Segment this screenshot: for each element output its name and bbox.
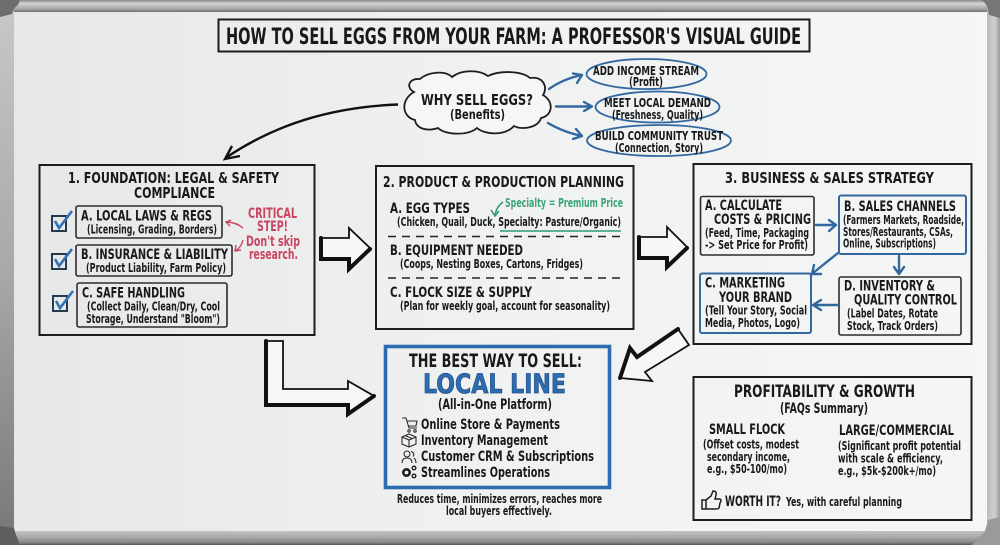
checkbox B — [52, 249, 72, 269]
cloud: why sell eggs — [404, 71, 551, 134]
heading: foundation — [68, 169, 280, 202]
checkbox C — [53, 291, 73, 311]
egg types: A. EGG TYPES — [390, 201, 470, 217]
calculate costs: (Feed, Time, Packaging — [705, 225, 809, 240]
title — [218, 20, 810, 52]
heading: product planning: 2. PRODUCT & PRODUCTION PLANNING — [383, 173, 624, 191]
icon: gears — [403, 466, 416, 478]
calculate costs: A. CALCULATE — [705, 198, 782, 214]
safe handling box: C. SAFE HANDLING — [82, 286, 185, 302]
inventory quality: Stock, Track Orders) — [847, 318, 938, 333]
benefit: build community trust — [587, 125, 731, 156]
heading: profitability — [734, 382, 915, 417]
marketing brand — [700, 274, 811, 333]
feature: operations: Streamlines Operations — [421, 465, 550, 481]
arrow: step 1 to step 2 — [320, 228, 371, 270]
marketing brand: YOUR BRAND — [718, 290, 792, 306]
flow arrows — [812, 220, 904, 310]
benefit: meet local demand: MEET LOCAL DEMAND — [604, 95, 711, 110]
panel: product planning — [376, 166, 634, 329]
large commercial: e.g., $5k-$200k+/mo) — [838, 463, 936, 478]
small flock — [703, 422, 799, 476]
caption: local line benefits: local buyers effectively. — [446, 503, 552, 518]
icon: cart — [402, 418, 417, 432]
equipment needed: (Coops, Nesting Boxes, Cartons, Fridges) — [400, 256, 583, 271]
arrow: step 2 to step 3 — [638, 227, 688, 268]
inventory quality — [839, 277, 961, 335]
benefit: meet local demand — [596, 92, 720, 122]
benefit: build community trust: BUILD COMMUNITY TRUST — [595, 128, 723, 143]
icon: box — [402, 434, 416, 447]
heading: foundation: COMPLIANCE — [134, 184, 215, 202]
egg types: Specialty = Premium Price — [505, 195, 623, 210]
arrow: step 3 to best way — [620, 329, 689, 381]
calculate costs: -> Set Price for Profit) — [705, 237, 808, 252]
calculate costs: COSTS & PRICING — [714, 212, 811, 228]
local laws box — [76, 206, 222, 238]
marketing brand: Media, Photos, Logo) — [705, 315, 800, 330]
inventory quality: D. INVENTORY & — [844, 278, 935, 294]
safe handling box: Storage, Understand "Bloom") — [86, 311, 220, 326]
calculate costs — [700, 196, 814, 255]
flock size: C. FLOCK SIZE & SUPPLY — [390, 285, 532, 301]
small flock: SMALL FLOCK — [709, 422, 786, 438]
marketing brand: (Tell Your Story, Social — [705, 302, 807, 318]
panel: profitability — [694, 377, 972, 520]
icon: customers — [402, 451, 416, 463]
feature: online store: Online Store & Payments — [421, 417, 560, 433]
icon: thumbs up — [702, 491, 721, 509]
benefit: build community trust: (Connection, Story) — [615, 140, 703, 155]
cloud: why sell eggs: WHY SELL EGGS? — [421, 91, 533, 109]
callout: critical step: CRITICAL — [248, 206, 297, 222]
feature: crm: Customer CRM & Subscriptions — [421, 449, 594, 465]
panel: business strategy — [694, 164, 972, 344]
local laws box: (Licensing, Grading, Borders) — [87, 222, 217, 236]
subtitle: (All-in-One Platform) — [438, 397, 552, 413]
equipment needed: B. EQUIPMENT NEEDED — [390, 243, 523, 259]
local laws box: A. LOCAL LAWS & REGS — [81, 208, 212, 224]
arrow: step 1 to best way — [266, 341, 374, 415]
flock size: (Plan for weekly goal, account for seasonality) — [400, 298, 610, 313]
callout: critical step: Don't skip — [246, 234, 300, 250]
small flock: e.g., $50-100/mo) — [707, 461, 787, 476]
equipment needed — [390, 243, 583, 271]
small flock: secondary income, — [707, 449, 790, 464]
heading: business strategy: 3. BUSINESS & SALES STRATEGY — [725, 169, 935, 187]
cloud: why sell eggs: (Benefits) — [450, 108, 505, 123]
sales channels — [839, 196, 966, 254]
verdict — [725, 494, 902, 510]
arrow: benefits to foundation — [225, 104, 398, 159]
verdict: Yes, with careful planning — [785, 494, 902, 509]
safe handling box — [77, 283, 227, 327]
callout: critical step: STEP! — [257, 219, 288, 235]
insurance box: (Product Liability, Farm Policy) — [86, 260, 226, 275]
feature: inventory: Inventory Management — [421, 433, 548, 449]
egg types — [390, 195, 623, 231]
sales channels: Online, Subscriptions) — [843, 236, 936, 250]
small flock: (Offset costs, modest — [703, 436, 799, 452]
heading: foundation: 1. FOUNDATION: LEGAL & SAFETY — [68, 169, 280, 187]
benefit: meet local demand: (Freshness, Quality) — [612, 107, 703, 122]
large commercial: with scale & efficiency, — [838, 450, 943, 466]
large commercial — [838, 423, 961, 478]
inventory quality: (Label Dates, Rotate — [847, 306, 938, 320]
insurance box — [76, 245, 232, 276]
panel: local line — [386, 346, 610, 488]
panel: foundation — [40, 165, 314, 335]
heading: best way: THE BEST WAY TO SELL: — [409, 351, 582, 372]
heading: profitability: (FAQs Summary) — [780, 401, 868, 417]
callout: critical step: research. — [249, 247, 298, 263]
benefit: add income stream — [586, 59, 706, 89]
safe handling box: (Collect Daily, Clean/Dry, Cool — [87, 298, 220, 314]
flock size — [390, 285, 610, 313]
arrows: benefits — [548, 74, 592, 139]
callout: critical step — [226, 206, 300, 263]
marketing brand: C. MARKETING — [705, 276, 785, 292]
heading: profitability: PROFITABILITY & GROWTH — [734, 382, 915, 401]
benefit: add income stream: ADD INCOME STREAM — [593, 63, 699, 78]
egg types: (Chicken, Quail, Duck, Specialty: Pasture/Organic) — [397, 214, 621, 229]
verdict: WORTH IT? — [725, 494, 781, 510]
logo text: local line: LOCAL LINE — [423, 369, 566, 400]
checkbox A — [52, 211, 72, 231]
benefit: add income stream: (Profit) — [629, 74, 663, 89]
insurance box: B. INSURANCE & LIABILITY — [81, 247, 228, 263]
caption: local line benefits — [397, 491, 602, 518]
caption: local line benefits: Reduces time, minimizes errors, reaches more — [397, 491, 602, 506]
